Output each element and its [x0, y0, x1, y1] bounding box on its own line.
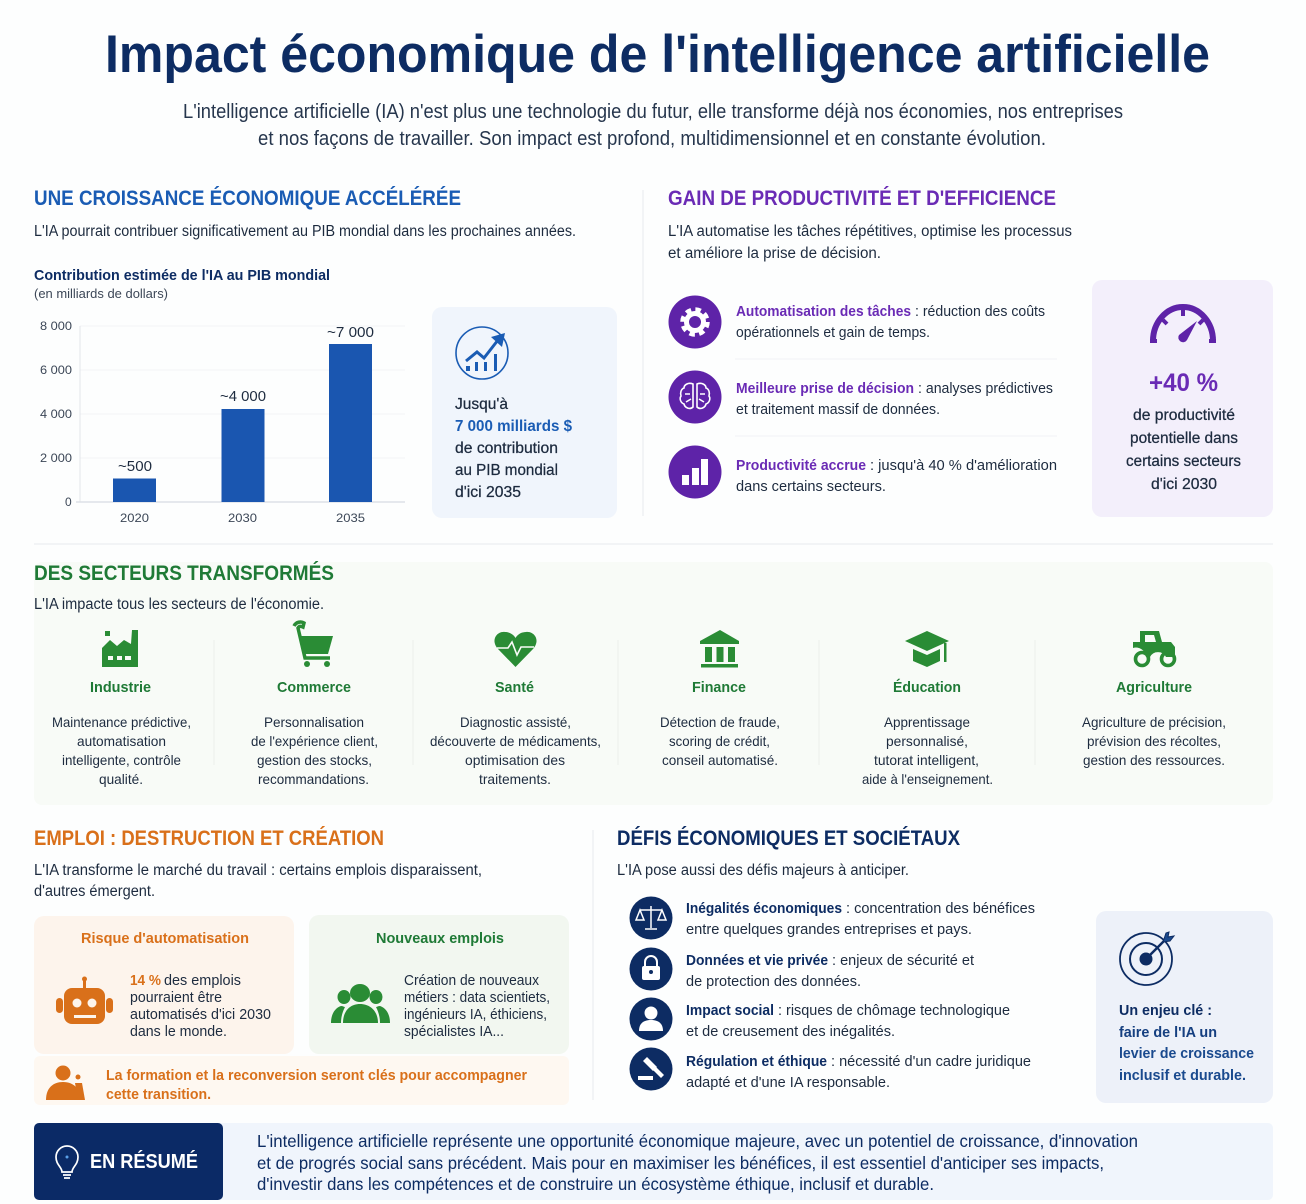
intro text — [183, 101, 1123, 150]
item: décision: : analyses prédictives — [918, 381, 1053, 397]
sector: santé: Santé — [495, 679, 534, 696]
icon: padlock — [630, 948, 672, 990]
text: résumé — [257, 1131, 1138, 1194]
callout: 7 000 milliards: de contribution — [455, 440, 558, 457]
sector: commerce: gestion des stocks, — [257, 752, 372, 768]
sector: éducation: aide à l'enseignement. — [862, 771, 993, 787]
bar chart: 4 000 — [40, 407, 72, 421]
intro text: L'intelligence artificielle (IA) n'est plus une technologie du futur, elle transforme déjà nos économies, nos entreprises — [183, 101, 1123, 123]
sector: santé: optimisation des — [465, 752, 565, 768]
bar chart: ~500 — [118, 459, 152, 475]
icon: bank — [700, 630, 739, 668]
item: données: : enjeux de sécurité et — [832, 953, 974, 969]
sector: industrie: intelligente, contrôle — [62, 752, 181, 768]
callout: formation: La formation et la reconversion seront clés pour accompagner — [106, 1067, 527, 1084]
text: secteurs intro: L'IA impacte tous les secteurs de l'économie. — [34, 596, 324, 613]
sector: agriculture: Agriculture de précision, — [1082, 714, 1226, 730]
chart title — [34, 267, 330, 301]
icon: graduation cap — [905, 631, 949, 667]
icon: people — [331, 984, 390, 1023]
icon: scales — [630, 896, 672, 940]
item: données: Données et vie privée — [686, 953, 828, 969]
item: décision: Meilleure prise de décision — [736, 381, 914, 397]
callout: formation: cette transition. — [106, 1086, 211, 1103]
panel: en résumé: EN RÉSUMÉ — [90, 1150, 198, 1173]
panel: secteurs transformés — [34, 562, 1273, 805]
callout: +40 %: de productivité — [1133, 407, 1235, 424]
callout: +40 % — [1092, 280, 1273, 517]
callout: +40 %: certains secteurs — [1126, 453, 1241, 470]
callout: enjeu clé: Un enjeu clé : — [1119, 1002, 1212, 1019]
card: nouveaux emplois: métiers : data scientiets, — [404, 990, 550, 1006]
sector: industrie: qualité. — [99, 771, 143, 787]
card: risque d'automatisation: pourraient être — [130, 990, 222, 1006]
item: inégalités: entre quelques grandes entreprises et pays. — [686, 922, 972, 938]
card: risque d'automatisation: 14 % — [130, 973, 161, 989]
title: Impact économique de l'intelligence artificielle — [105, 25, 1210, 84]
sector: éducation — [862, 631, 993, 787]
sector: agriculture: prévision des récoltes, — [1087, 733, 1221, 749]
bar chart: 2030 — [228, 511, 257, 525]
item: impact social: et de creusement des inégalités. — [686, 1024, 895, 1040]
callout: 7 000 milliards: 7 000 milliards $ — [455, 418, 572, 435]
text: productivité intro: L'IA automatise les tâches répétitives, optimise les processus — [668, 223, 1072, 240]
icon: person — [630, 998, 672, 1040]
item: automatisation: Automatisation des tâches — [736, 304, 911, 320]
intro text: et nos façons de travailler. Son impact est profond, multidimensionnel et en constante évolution. — [258, 128, 1046, 150]
icon: brain — [668, 370, 722, 424]
item: productivité accrue: Productivité accrue — [736, 458, 866, 474]
panel: productivité — [668, 187, 1273, 517]
callout: +40 %: +40 % — [1149, 369, 1218, 397]
heading: productivité: GAIN DE PRODUCTIVITÉ ET D'EFFICIENCE — [668, 187, 1056, 210]
icon: trainer — [46, 1066, 85, 1100]
item: impact social: : risques de chômage technologique — [778, 1003, 1010, 1019]
text: emploi intro: L'IA transforme le marché du travail : certains emplois disparaissent, — [34, 862, 482, 879]
callout: formation — [34, 1056, 569, 1105]
text: défis intro: L'IA pose aussi des défis majeurs à anticiper. — [617, 862, 909, 879]
sector: industrie: Maintenance prédictive, — [52, 714, 191, 730]
sector: industrie: Industrie — [90, 679, 151, 696]
sector: commerce: Personnalisation — [264, 714, 364, 730]
heading: défis: DÉFIS ÉCONOMIQUES ET SOCIÉTAUX — [617, 827, 960, 850]
item: inégalités: Inégalités économiques — [686, 901, 842, 917]
item: régulation: adapté et d'une IA responsable. — [686, 1075, 890, 1091]
callout: +40 %: potentielle dans — [1130, 430, 1238, 447]
sector: finance: Détection de fraude, — [660, 714, 780, 730]
text: croissance intro: L'IA pourrait contribuer significativement au PIB mondial dans les prochaines années. — [34, 223, 576, 240]
item: automatisation: opérationnels et gain de temps. — [736, 325, 930, 341]
heading: secteurs: DES SECTEURS TRANSFORMÉS — [34, 562, 334, 585]
item: régulation: Régulation et éthique — [686, 1054, 827, 1070]
sector: agriculture: gestion des ressources. — [1083, 752, 1225, 768]
callout: 7 000 milliards: Jusqu'à — [455, 396, 508, 413]
icon: target — [1120, 932, 1174, 985]
item: automatisation — [668, 296, 1045, 348]
bar chart: 6 000 — [40, 363, 72, 377]
text: productivité intro — [668, 223, 1072, 262]
item: décision: et traitement massif de données. — [736, 402, 940, 418]
sector: industrie: automatisation — [77, 733, 166, 749]
bar chart: ~7 000 — [327, 325, 374, 341]
sector: éducation: Éducation — [893, 679, 961, 696]
icon: light bulb — [56, 1146, 78, 1178]
sector: finance: scoring de crédit, — [669, 733, 770, 749]
item: inégalités — [630, 896, 1035, 940]
panel: défis — [617, 827, 1273, 1103]
item: données: de protection des données. — [686, 974, 861, 990]
sector: commerce — [251, 622, 378, 787]
icon: growth chart — [456, 327, 508, 379]
callout: enjeu clé: faire de l'IA un — [1119, 1024, 1217, 1041]
panel: croissance économique — [34, 187, 617, 525]
callout: enjeu clé — [1096, 911, 1273, 1103]
sector: santé: découverte de médicaments, — [430, 733, 601, 749]
item: données — [630, 948, 974, 990]
icon: tractor — [1133, 631, 1175, 666]
chart title: (en milliards de dollars) — [34, 286, 168, 301]
icon: gavel — [630, 1048, 672, 1090]
item: impact social: Impact social — [686, 1003, 774, 1019]
panel: emploi — [34, 827, 569, 1105]
callout: enjeu clé: inclusif et durable. — [1119, 1067, 1246, 1084]
bar chart: 0 — [65, 495, 72, 509]
item: décision — [668, 370, 1053, 424]
sector: agriculture — [1082, 631, 1226, 768]
text: emploi intro — [34, 862, 482, 900]
sector: commerce: Commerce — [277, 679, 351, 696]
card: risque d'automatisation: des emplois — [164, 973, 241, 989]
heading: croissance: UNE CROISSANCE ÉCONOMIQUE ACCÉLÉRÉE — [34, 187, 461, 210]
item: régulation — [630, 1048, 1031, 1091]
sector: finance: conseil automatisé. — [662, 752, 778, 768]
item: inégalités: : concentration des bénéfices — [846, 901, 1035, 917]
card: nouveaux emplois: ingénieurs IA, éthiciens, — [404, 1007, 547, 1023]
sector: agriculture: Agriculture — [1116, 679, 1192, 696]
icon: factory — [102, 630, 138, 667]
callout: 7 000 milliards: au PIB mondial — [455, 462, 558, 479]
bar chart: 2 000 — [40, 451, 72, 465]
icon: robot — [56, 976, 113, 1024]
card: risque d'automatisation: Risque d'automatisation — [81, 930, 249, 947]
sector: éducation: tutorat intelligent, — [874, 752, 979, 768]
card: nouveaux emplois: Création de nouveaux — [404, 973, 540, 989]
card: nouveaux emplois: spécialistes IA... — [404, 1024, 504, 1040]
card: nouveaux emplois: Nouveaux emplois — [376, 930, 504, 947]
bar chart: ~4 000 — [220, 389, 266, 405]
bar chart: 2020 — [120, 511, 149, 525]
bar chart: 8 000 — [40, 319, 72, 333]
text: résumé: et de progrés social sans précédent. Mais pour en maximiser les bénéfices, il est essentiel d'anticiper ses impacts, — [257, 1153, 1104, 1173]
sector: santé: traitements. — [479, 771, 551, 787]
sector: éducation: personnalisé, — [886, 733, 968, 749]
sector: santé — [430, 632, 601, 787]
icon: cart — [294, 622, 333, 667]
callout: 7 000 milliards — [432, 307, 617, 518]
text: résumé: L'intelligence artificielle représente une opportunité économique majeure, avec un potentiel de croissance, d'innovation — [257, 1131, 1138, 1151]
card: risque d'automatisation: automatisés d'ici 2030 — [130, 1007, 271, 1023]
sector: commerce: de l'expérience client, — [251, 733, 378, 749]
heading: emploi: EMPLOI : DESTRUCTION ET CRÉATION — [34, 827, 384, 850]
text: productivité intro: et améliore la prise de décision. — [668, 245, 881, 262]
card: risque d'automatisation — [34, 916, 294, 1054]
text: résumé: d'investir dans les compétences et de construire un écosystème éthique, inclusif et durable. — [257, 1174, 934, 1194]
icon: gear — [668, 296, 722, 348]
icon: bars — [668, 446, 722, 498]
sector: santé: Diagnostic assisté, — [460, 714, 571, 730]
item: automatisation: : réduction des coûts — [915, 304, 1045, 320]
bar chart — [40, 319, 405, 525]
sector: industrie — [52, 630, 191, 787]
card: nouveaux emplois — [309, 915, 569, 1054]
text: emploi intro: d'autres émergent. — [34, 883, 155, 900]
item: régulation: : nécessité d'un cadre juridique — [831, 1054, 1031, 1070]
sector: éducation: Apprentissage — [884, 714, 970, 730]
icon: heart — [494, 632, 537, 667]
item: productivité accrue: : jusqu'à 40 % d'amélioration — [870, 458, 1057, 474]
item: productivité accrue — [668, 446, 1057, 498]
card: risque d'automatisation: dans le monde. — [130, 1024, 227, 1040]
sector: commerce: recommandations. — [258, 771, 369, 787]
callout: +40 %: d'ici 2030 — [1151, 476, 1217, 493]
sector: finance — [660, 630, 780, 768]
chart title: Contribution estimée de l'IA au PIB mondial — [34, 267, 330, 284]
callout: enjeu clé: levier de croissance — [1119, 1045, 1254, 1062]
sector: finance: Finance — [692, 679, 746, 696]
callout: 7 000 milliards: d'ici 2035 — [455, 484, 521, 501]
item: impact social — [630, 998, 1010, 1040]
icon: gauge — [1150, 307, 1216, 342]
item: productivité accrue: dans certains secteurs. — [736, 479, 886, 495]
bar chart: 2035 — [336, 511, 365, 525]
panel: en résumé — [34, 1123, 1273, 1200]
